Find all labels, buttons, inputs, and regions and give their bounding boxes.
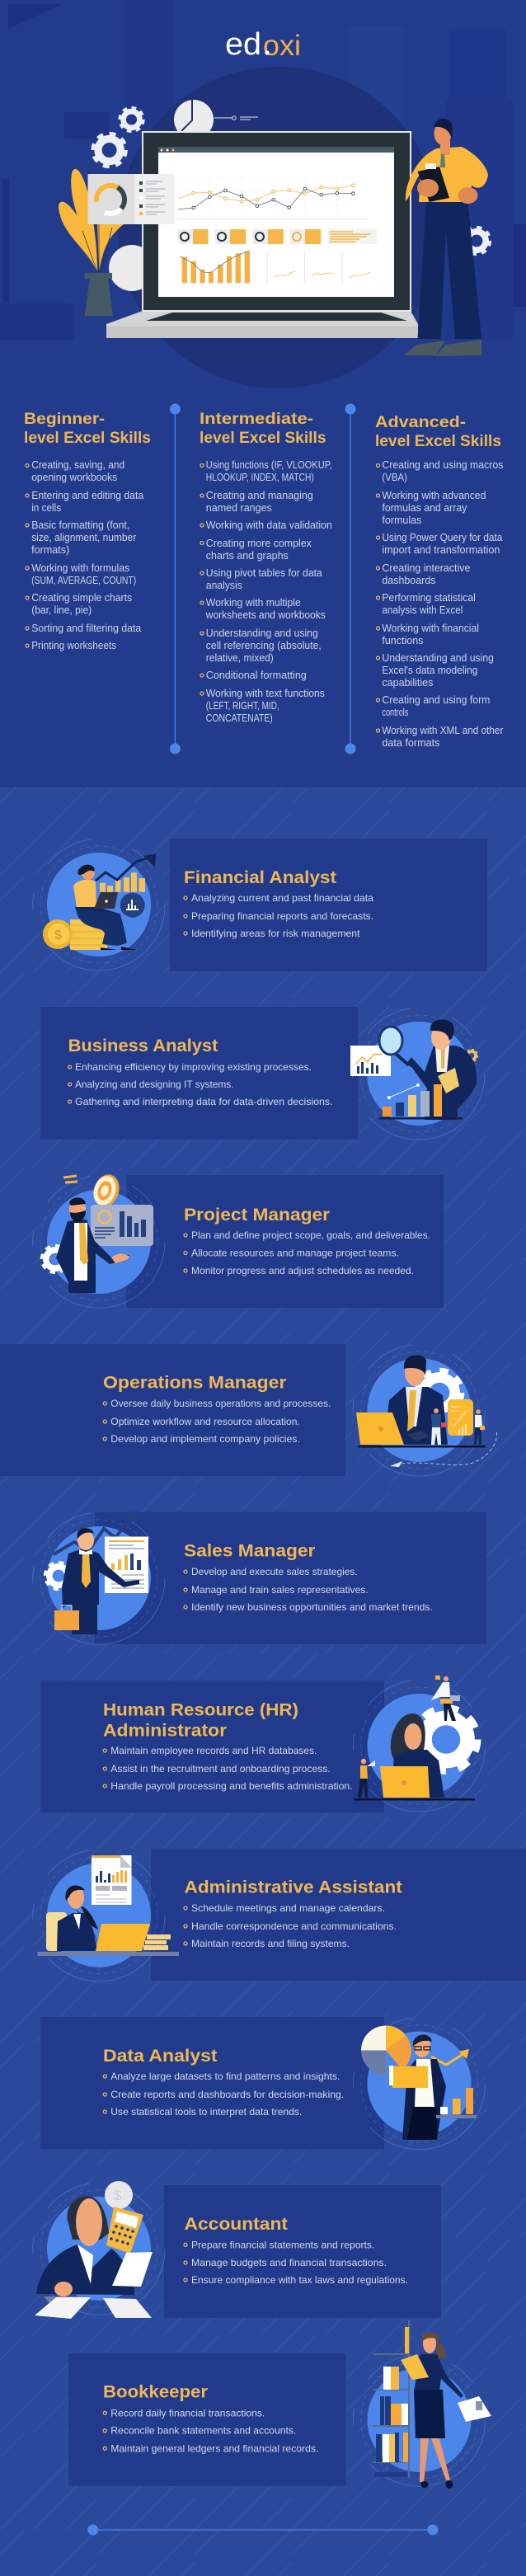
- small figure with megaphone: [358, 1759, 375, 1798]
- column: beginner skills: (SUM, AVERAGE, COUNT): [31, 575, 136, 586]
- column: intermediate skills: cell referencing (absolute,: [206, 640, 322, 651]
- bullet list: Assist in the recruitment and onboarding process.: [110, 1763, 331, 1775]
- logo: [225, 27, 301, 62]
- column: advanced skills: formulas and array: [382, 502, 467, 514]
- column: beginner skills: Basic formatting (font,: [31, 519, 129, 531]
- column: advanced skills: analysis with Excel: [382, 604, 463, 616]
- panel: Financial Analyst: [33, 839, 487, 971]
- mini sparklines: [267, 251, 370, 283]
- bullet list: Use statistical tools to interpret data trends.: [110, 2106, 302, 2118]
- bullet list: Prepare financial statements and reports.: [191, 2239, 374, 2250]
- illustration: assistant at desk: [33, 1850, 179, 1981]
- bullet list: [184, 892, 373, 939]
- column: advanced skills: controls: [382, 707, 408, 718]
- column: intermediate skills: Using pivot tables for data: [206, 567, 322, 579]
- bullet list: Handle correspondence and communications.: [191, 1920, 397, 1932]
- column: advanced skills: import and transformation: [382, 544, 500, 556]
- bullet list: Monitor progress and adjust schedules as needed.: [191, 1265, 414, 1276]
- stat tiles: [178, 229, 377, 244]
- bullet list: Reconcile bank statements and accounts.: [110, 2425, 296, 2437]
- column: beginner skills: Entering and editing data: [31, 490, 143, 501]
- panel: skills columns: [24, 404, 503, 754]
- divider: right: [345, 404, 356, 754]
- panel: Accountant: [33, 2181, 441, 2319]
- column: advanced skills: Creating and using macros: [382, 459, 503, 471]
- bullet list: [103, 2071, 344, 2118]
- column: advanced skills: formulas: [382, 515, 421, 526]
- column: advanced skills: Excel's data modeling: [382, 665, 477, 676]
- bullet list: Schedule meetings and manage calendars.: [191, 1902, 385, 1914]
- column: intermediate skills: Using functions (IF, VLOOKUP,: [206, 459, 332, 471]
- bullet list: [103, 1398, 331, 1445]
- bullet list: Enhancing efficiency by improving existing processes.: [75, 1061, 312, 1073]
- column: intermediate skills: (LEFT, RIGHT, MID,: [206, 700, 279, 712]
- heading: Financial Analyst: [184, 867, 336, 887]
- column: intermediate skills: Working with multiple: [206, 597, 301, 609]
- panel: Sales Manager: [33, 1511, 486, 1644]
- heading: Administrator: [103, 1721, 228, 1741]
- column: advanced skills: level Excel Skills: [375, 433, 501, 450]
- heading: [103, 1699, 298, 1741]
- heading: Accountant: [185, 2214, 288, 2234]
- icon: gears: [93, 108, 490, 254]
- column: intermediate skills: HLOOKUP, INDEX, MATCH): [206, 472, 314, 483]
- bullet list: Develop and implement company policies.: [110, 1433, 300, 1445]
- bullet list: Handle payroll processing and benefits administration.: [110, 1780, 353, 1792]
- panel: Business Analyst: [40, 1007, 485, 1140]
- column: beginner skills: size, alignment, number: [31, 532, 136, 543]
- bullet list: Preparing financial reports and forecasts.: [191, 910, 373, 922]
- column: beginner skills: Printing worksheets: [31, 640, 116, 651]
- column: intermediate skills: Creating and managing: [206, 490, 313, 501]
- column: advanced skills: [375, 414, 503, 749]
- small figures: [431, 1408, 485, 1445]
- column: advanced skills: Working with financial: [382, 623, 479, 634]
- column: beginner skills: Creating simple charts: [31, 592, 132, 604]
- panel: Administrative Assistant: [33, 1849, 526, 1981]
- illustration: sales manager with report: [33, 1511, 165, 1644]
- illustration: data analyst with pie chart: [353, 2019, 486, 2150]
- donut panel: [88, 174, 175, 224]
- bullet list: Create reports and dashboards for decision-making.: [110, 2089, 344, 2100]
- divider: footer timeline: [87, 2525, 438, 2535]
- column: intermediate skills: Understanding and using: [206, 628, 318, 639]
- column: advanced skills: Understanding and using: [382, 652, 494, 664]
- column: intermediate skills: Working with text functions: [206, 688, 325, 699]
- column: intermediate skills: level Excel Skills: [200, 430, 326, 447]
- bullet list: Allocate resources and manage project teams.: [191, 1247, 399, 1258]
- bullet list: Maintain records and filing systems.: [191, 1938, 350, 1949]
- bullet list: Maintain employee records and HR databases.: [110, 1745, 317, 1756]
- bullet list: [184, 1566, 433, 1613]
- illustration: bookkeeper with shelves: [353, 2320, 491, 2489]
- bullet list: Optimize workflow and resource allocation.: [110, 1416, 300, 1427]
- character: presenter: [404, 119, 488, 356]
- bullet list: [184, 1229, 430, 1276]
- plant: [59, 169, 124, 316]
- big white pie behind plant: [109, 245, 155, 291]
- column: intermediate skills: Creating more complex: [206, 538, 312, 549]
- heading: Project Manager: [184, 1205, 331, 1225]
- column: intermediate skills: charts and graphs: [206, 550, 289, 562]
- bullet list: Analyze large datasets to find patterns and insights.: [110, 2071, 340, 2082]
- bullet list: [184, 1902, 397, 1949]
- bullet list: Develop and execute sales strategies.: [191, 1566, 358, 1577]
- column: intermediate skills: relative, mixed): [206, 652, 274, 664]
- column: beginner skills: level Excel Skills: [24, 430, 151, 447]
- column: advanced skills: Working with XML and other: [382, 725, 503, 736]
- column: beginner skills: Creating, saving, and: [31, 459, 124, 471]
- column: beginner skills: Sorting and filtering data: [31, 623, 141, 634]
- column: intermediate skills: Conditional formatting: [206, 670, 307, 681]
- bullet list: Gathering and interpreting data for data-driven decisions.: [75, 1096, 333, 1107]
- small figure on gear: [431, 1676, 460, 1721]
- column: advanced skills: Creating interactive: [382, 562, 470, 574]
- bullet list: Analyzing and designing IT systems.: [75, 1079, 234, 1090]
- panel: Project Manager: [33, 1171, 444, 1308]
- column: advanced skills: Working with advanced: [382, 490, 486, 501]
- illustration: HR administrator with gear: [353, 1676, 486, 1812]
- line chart: [178, 177, 368, 219]
- column: intermediate skills: worksheets and workbooks: [205, 609, 326, 621]
- column: intermediate skills: CONCATENATE): [206, 712, 273, 724]
- column: beginner skills: Working with formulas: [31, 562, 129, 574]
- heading: Business Analyst: [68, 1036, 218, 1055]
- bullet list: Identify new business opportunities and market trends.: [191, 1601, 433, 1613]
- column: intermediate skills: Intermediate-: [200, 411, 313, 428]
- column: advanced skills: dashboards: [382, 575, 435, 586]
- illustration: operations manager at laptop: [353, 1345, 497, 1476]
- illustration: project manager with dashboard: [33, 1171, 165, 1308]
- heading: Data Analyst: [103, 2046, 218, 2066]
- column: advanced skills: Using Power Query for data: [382, 532, 502, 543]
- column: advanced skills: (VBA): [382, 472, 407, 483]
- bullet list: Identifying areas for risk management: [191, 928, 360, 939]
- bullet list: Oversee daily business operations and processes.: [110, 1398, 331, 1409]
- column: advanced skills: Performing statistical: [382, 592, 476, 604]
- panel: Data Analyst: [40, 2017, 486, 2150]
- panel: Operations Manager: [0, 1344, 497, 1476]
- hero backdrop circle: [118, 67, 439, 388]
- logo: oxi: [263, 30, 301, 62]
- column: intermediate skills: analysis: [206, 580, 242, 591]
- bar chart: [180, 251, 250, 283]
- column: advanced skills: data formats: [382, 737, 439, 749]
- illustration: analyst with magnifier: [350, 1008, 485, 1140]
- illustration: accountant with calculator: $: [114, 2188, 122, 2203]
- bullet list: Ensure compliance with tax laws and regulations.: [191, 2274, 408, 2286]
- column: advanced skills: Advanced-: [375, 414, 466, 431]
- heading: Sales Manager: [184, 1541, 316, 1561]
- column: advanced skills: capabilities: [382, 677, 433, 689]
- column: intermediate skills: [200, 411, 332, 724]
- column: beginner skills: in cells: [31, 502, 61, 514]
- column: beginner skills: opening workbooks: [31, 472, 117, 483]
- column: intermediate skills: Working with data validation: [206, 519, 332, 531]
- illustration: accountant with calculator: [33, 2181, 165, 2319]
- bullet list: [103, 2407, 318, 2454]
- column: beginner skills: [24, 411, 151, 651]
- bullet list: Plan and define project scope, goals, and deliverables.: [191, 1229, 430, 1241]
- panel: Bookkeeper: [68, 2320, 491, 2489]
- illustration: analyst with laptop and coins: $: [54, 928, 62, 942]
- bullet list: Record daily financial transactions.: [110, 2407, 265, 2419]
- divider: left: [170, 404, 181, 754]
- heading: Bookkeeper: [103, 2382, 209, 2402]
- bullet list: [68, 1061, 332, 1107]
- column: advanced skills: Creating and using form: [382, 694, 490, 706]
- icon: pie chart: [174, 100, 258, 139]
- illustration: analyst with laptop and coins: [33, 839, 165, 971]
- heading: Operations Manager: [103, 1373, 287, 1393]
- bullet list: Analyzing current and past financial data: [191, 892, 373, 904]
- panel: Human Resource Administrator: [40, 1676, 486, 1812]
- bullet list: [184, 2239, 408, 2286]
- heading: Human Resource (HR): [103, 1699, 298, 1719]
- bullet list: [103, 1745, 353, 1792]
- bullet list: Manage and train sales representatives.: [191, 1584, 369, 1596]
- bullet list: Manage budgets and financial transactions.: [191, 2257, 387, 2268]
- column: beginner skills: formats): [31, 544, 69, 556]
- column: intermediate skills: named ranges: [206, 502, 272, 514]
- column: advanced skills: functions: [382, 635, 423, 646]
- heading: Administrative Assistant: [185, 1877, 402, 1897]
- column: beginner skills: Beginner-: [24, 411, 105, 428]
- bullet list: Maintain general ledgers and financial records.: [110, 2442, 318, 2454]
- column: beginner skills: (bar, line, pie): [31, 604, 92, 616]
- laptop: [106, 132, 418, 338]
- logo: ed: [225, 27, 261, 62]
